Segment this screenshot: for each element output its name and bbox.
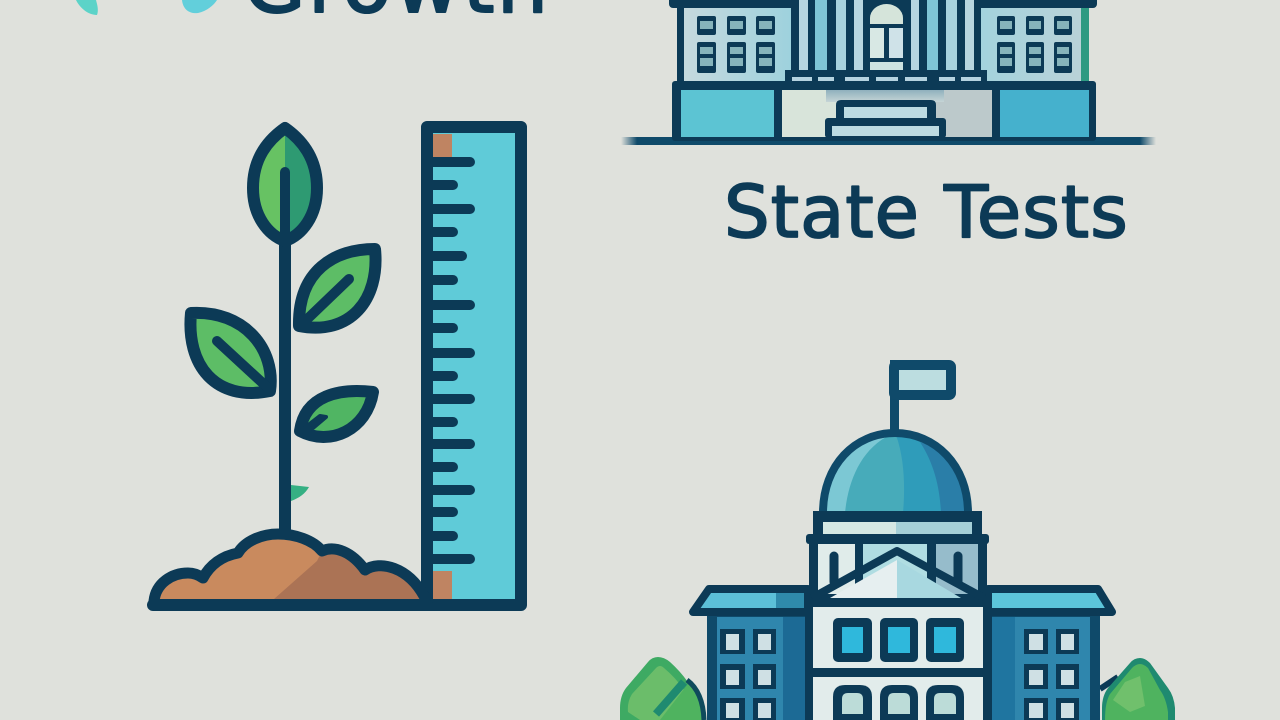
stem — [279, 240, 291, 535]
plinth — [785, 70, 987, 90]
left wing windows — [720, 629, 776, 720]
left wing — [684, 8, 791, 81]
right leaf — [299, 249, 376, 328]
icon: classical building — [621, 0, 1156, 145]
lower leaf — [298, 391, 373, 437]
green edge — [1081, 8, 1089, 81]
central block — [805, 598, 992, 720]
left wing — [693, 589, 808, 720]
left tree — [620, 657, 704, 720]
dome — [823, 433, 968, 513]
icon: capitol building — [620, 360, 1175, 720]
soil mound — [153, 534, 427, 605]
flag — [890, 360, 951, 432]
drum — [806, 511, 989, 600]
ground line — [621, 137, 1156, 145]
top leaf — [253, 128, 317, 241]
left leaf — [190, 313, 271, 393]
right wing — [988, 589, 1112, 720]
small sprout — [291, 485, 309, 501]
door — [870, 4, 903, 70]
right wing windows — [997, 16, 1072, 73]
logo fragment: teal leaves — [76, 0, 217, 15]
left wing windows — [697, 16, 775, 73]
lower central windows — [833, 685, 964, 720]
right wing — [981, 8, 1081, 81]
upper central windows — [833, 618, 964, 662]
base — [672, 81, 1096, 141]
ruler — [427, 127, 521, 605]
right tree — [1100, 658, 1175, 720]
pediment — [812, 551, 984, 598]
right wing windows — [1024, 629, 1079, 720]
building silhouette — [677, 4, 1089, 90]
heading: State Tests: State Tests — [724, 170, 1129, 254]
columns — [799, 0, 974, 70]
steps — [825, 100, 946, 138]
roof bar — [669, 0, 1097, 8]
icon: plant and ruler — [153, 127, 521, 605]
